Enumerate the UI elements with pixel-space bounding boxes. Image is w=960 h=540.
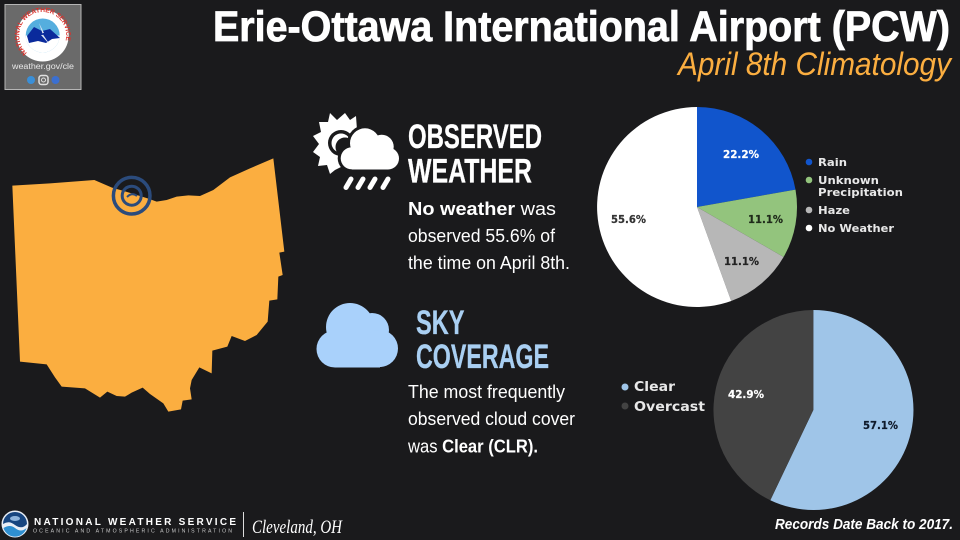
legend: sky coverage [622, 379, 706, 415]
pie chart: sky coverage [713, 310, 913, 510]
footnote: records: Records Date Back to 2017. [775, 517, 953, 533]
pie chart: observed weather [597, 107, 797, 307]
legend: sky coverage: Overcast [634, 399, 706, 415]
text: sky coverage description: The most frequently [408, 381, 566, 402]
legend: observed weather: No Weather [818, 222, 895, 235]
text: sky coverage description: was Clear (CLR). [407, 436, 538, 456]
text: observed weather description: No weather was [408, 198, 556, 219]
heading: observed weather: OBSERVED [408, 118, 542, 156]
icon: airport location rings [113, 177, 150, 214]
legend: observed weather: Unknown [818, 174, 879, 187]
text: observed weather description [408, 198, 570, 273]
pie chart: sky coverage: 42.9% [728, 389, 764, 401]
icon: sun, cloud and rain [313, 113, 399, 188]
footer: NOAA and NWS identity: OCEANIC AND ATMOSPHERIC ADMINISTRATION [33, 528, 232, 534]
footer: NOAA and NWS identity: NATIONAL WEATHER SERVICE [34, 517, 236, 528]
legend: sky coverage: Clear [634, 379, 675, 395]
icon: cloud [316, 303, 398, 368]
logo: NWS badge: NATIONAL WEATHER SERVICE [14, 8, 71, 56]
heading: sky coverage: SKY [416, 304, 465, 342]
text: observed weather description: the time on April 8th. [408, 252, 570, 273]
legend: observed weather: Precipitation [818, 186, 903, 199]
heading: observed weather: WEATHER [408, 152, 532, 190]
legend: observed weather [806, 156, 903, 235]
pie chart: observed weather: 11.1% [748, 214, 783, 226]
pie chart: observed weather: 11.1% [724, 256, 759, 268]
footer: NOAA and NWS identity: Cleveland, OH [252, 517, 343, 538]
icon: NOAA logo [2, 510, 28, 538]
pie chart: observed weather: 22.2% [723, 149, 759, 161]
map: Ohio state shape [12, 158, 284, 412]
footer: NOAA and NWS identity [2, 510, 343, 538]
pie chart: sky coverage: 57.1% [863, 420, 898, 432]
text: observed weather description: observed 55.6% of [408, 225, 556, 246]
pie chart: observed weather: 55.6% [611, 214, 646, 226]
logo: NWS badge [4, 4, 82, 90]
legend: observed weather: Rain [818, 156, 847, 169]
map: Ohio with airport marker [12, 158, 284, 412]
legend: observed weather: Haze [818, 204, 850, 217]
text: sky coverage description [407, 381, 575, 456]
text: sky coverage description: observed cloud cover [408, 408, 575, 429]
logo: NWS badge: weather.gov/cle [11, 62, 75, 71]
heading: sky coverage: COVERAGE [416, 338, 549, 376]
